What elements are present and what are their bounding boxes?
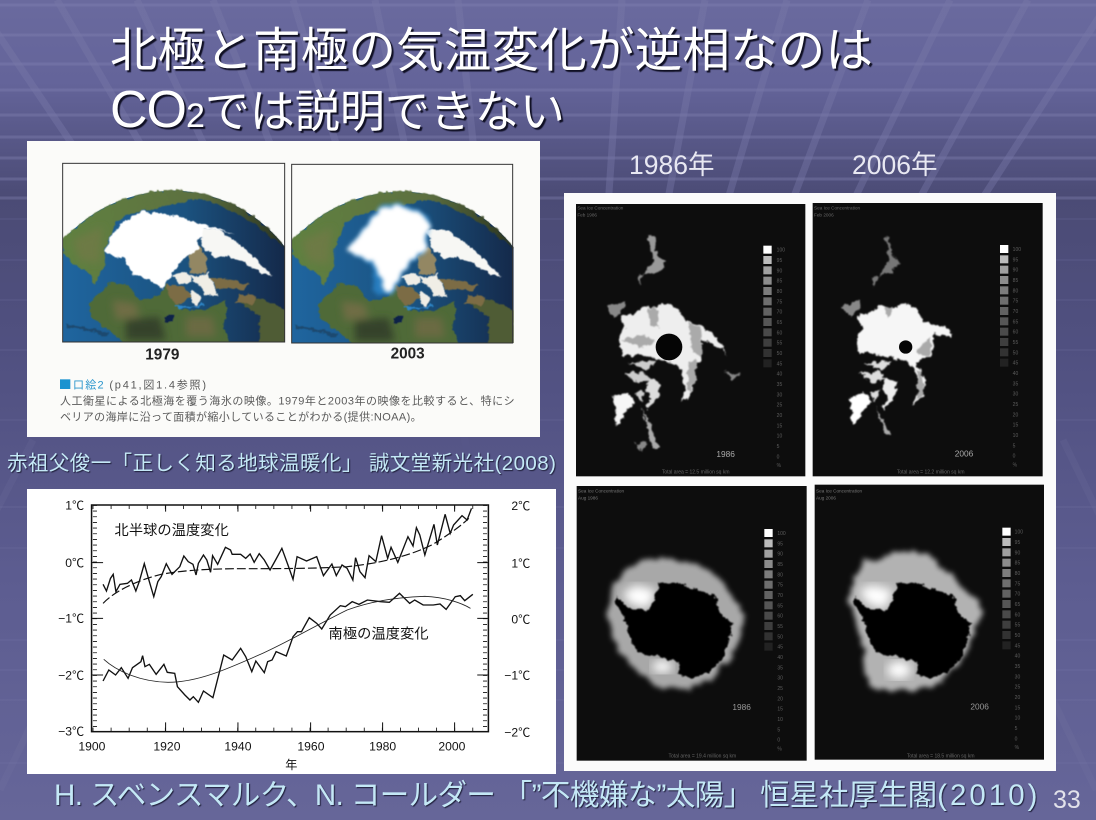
figure caption — [60, 378, 515, 424]
right axis labels: 0℃ — [511, 612, 530, 626]
northern hemisphere series label: 北半球の温度変化 — [115, 522, 229, 538]
x axis labels: 1940 — [224, 739, 252, 753]
x axis labels: 1900 — [78, 739, 106, 753]
map: Arctic 1986: 1986 — [716, 449, 735, 459]
x axis labels: 1960 — [297, 739, 325, 753]
left axis labels: 1℃ — [65, 499, 84, 513]
figure caption: (p41,図1.4参照) — [109, 378, 206, 391]
year label 2006: 2006年 — [852, 150, 937, 180]
line chart: northern hemisphere vs Antarctic temperature change — [27, 489, 556, 774]
photo panel: Arctic sea ice 1979 vs 2003 — [27, 141, 540, 437]
panel: satellite sea-ice concentration maps — [564, 193, 1056, 771]
left axis labels: 0℃ — [65, 556, 84, 570]
map: Arctic 1986: Feb 1986 — [577, 212, 597, 217]
figure caption: 口絵2 — [73, 378, 104, 391]
right axis labels: −2℃ — [504, 725, 530, 739]
map: Antarctic 2006: 2006 — [970, 701, 989, 711]
x axis labels: 1920 — [153, 739, 181, 753]
map: Arctic 2006 — [813, 203, 1043, 476]
map: Arctic 2006: 2006 — [955, 448, 974, 458]
sea ice 1979 — [104, 212, 234, 288]
map: Arctic 1986 — [576, 204, 805, 476]
figure caption: 人工衛星による北極海を覆う海氷の映像。1979年と2003年の映像を比較すると、特にシ — [60, 393, 515, 407]
map: Arctic 2006: Feb 2006 — [814, 212, 834, 217]
figure caption: ベリアの海岸に沿って面積が縮小していることがわかる(提供:NOAA)。 — [60, 410, 422, 424]
map: Arctic 2006: Sea Ice Concentration — [814, 206, 860, 211]
left axis labels: −3℃ — [58, 725, 84, 739]
map: Arctic 1986: Sea Ice Concentration — [577, 206, 624, 211]
x axis labels: 2000 — [438, 739, 466, 753]
source credit: Akasofu: 赤祖父俊一「正しく知る地球温暖化」 誠文堂新光社(2008) — [7, 452, 556, 475]
map: Antarctic 2006 — [815, 485, 1044, 760]
sea ice 2003 — [348, 203, 431, 297]
right axis labels — [504, 499, 530, 739]
right axis labels: −1℃ — [504, 668, 530, 682]
northern hemisphere annual line — [103, 508, 471, 597]
map: Antarctic 1986: Total area = 19.4 million sq km — [668, 753, 736, 759]
map: Antarctic 1986: Sea Ice Concentration — [578, 489, 624, 494]
left axis labels: −1℃ — [58, 612, 84, 626]
title line 1: 北極と南極の気温変化が逆相なのは — [110, 25, 873, 78]
page number: 33 — [1053, 786, 1081, 814]
Antarctic series label: 南極の温度変化 — [329, 625, 429, 641]
x axis labels — [78, 739, 466, 772]
right axis labels: 2℃ — [511, 499, 530, 513]
left axis labels: −2℃ — [58, 668, 84, 682]
map: Arctic 1986: Total area = 12.5 million sq km — [662, 470, 730, 476]
map: Antarctic 2006: Aug 2006 — [816, 495, 836, 500]
map: Antarctic 2006: Total area = 18.5 million sq km — [907, 753, 975, 759]
right axis labels: 1℃ — [511, 556, 530, 570]
map: Antarctic 1986: Aug 1986 — [578, 495, 598, 500]
left axis labels — [58, 499, 84, 739]
year labels: 1979 — [145, 347, 179, 364]
map: Antarctic 1986: 1986 — [732, 702, 751, 712]
year label 1986: 1986年 — [629, 150, 714, 180]
title line 2: CO2では説明できない — [110, 81, 565, 139]
map: Antarctic 2006: Sea Ice Concentration — [816, 489, 862, 494]
photo panel: Arctic sea ice 1979 vs 2003: 2003 — [391, 346, 425, 363]
map: Antarctic 1986 — [577, 486, 807, 761]
Antarctic annual line — [103, 593, 473, 702]
map: Arctic 2006: Total area = 12.2 million sq km — [897, 470, 965, 476]
Antarctic smooth trend line — [104, 596, 470, 682]
title — [110, 25, 873, 139]
northern hemisphere trend dashed line — [103, 518, 469, 603]
source credit: Svensmark and Calder: H. スベンスマルク、N. コールダー 「”不機嫌な”太陽」 恒星社厚生閣(2010) — [54, 779, 1040, 812]
axes and ticks — [92, 505, 488, 732]
x axis labels: 1980 — [369, 739, 396, 753]
x axis labels: 年 — [285, 758, 297, 772]
